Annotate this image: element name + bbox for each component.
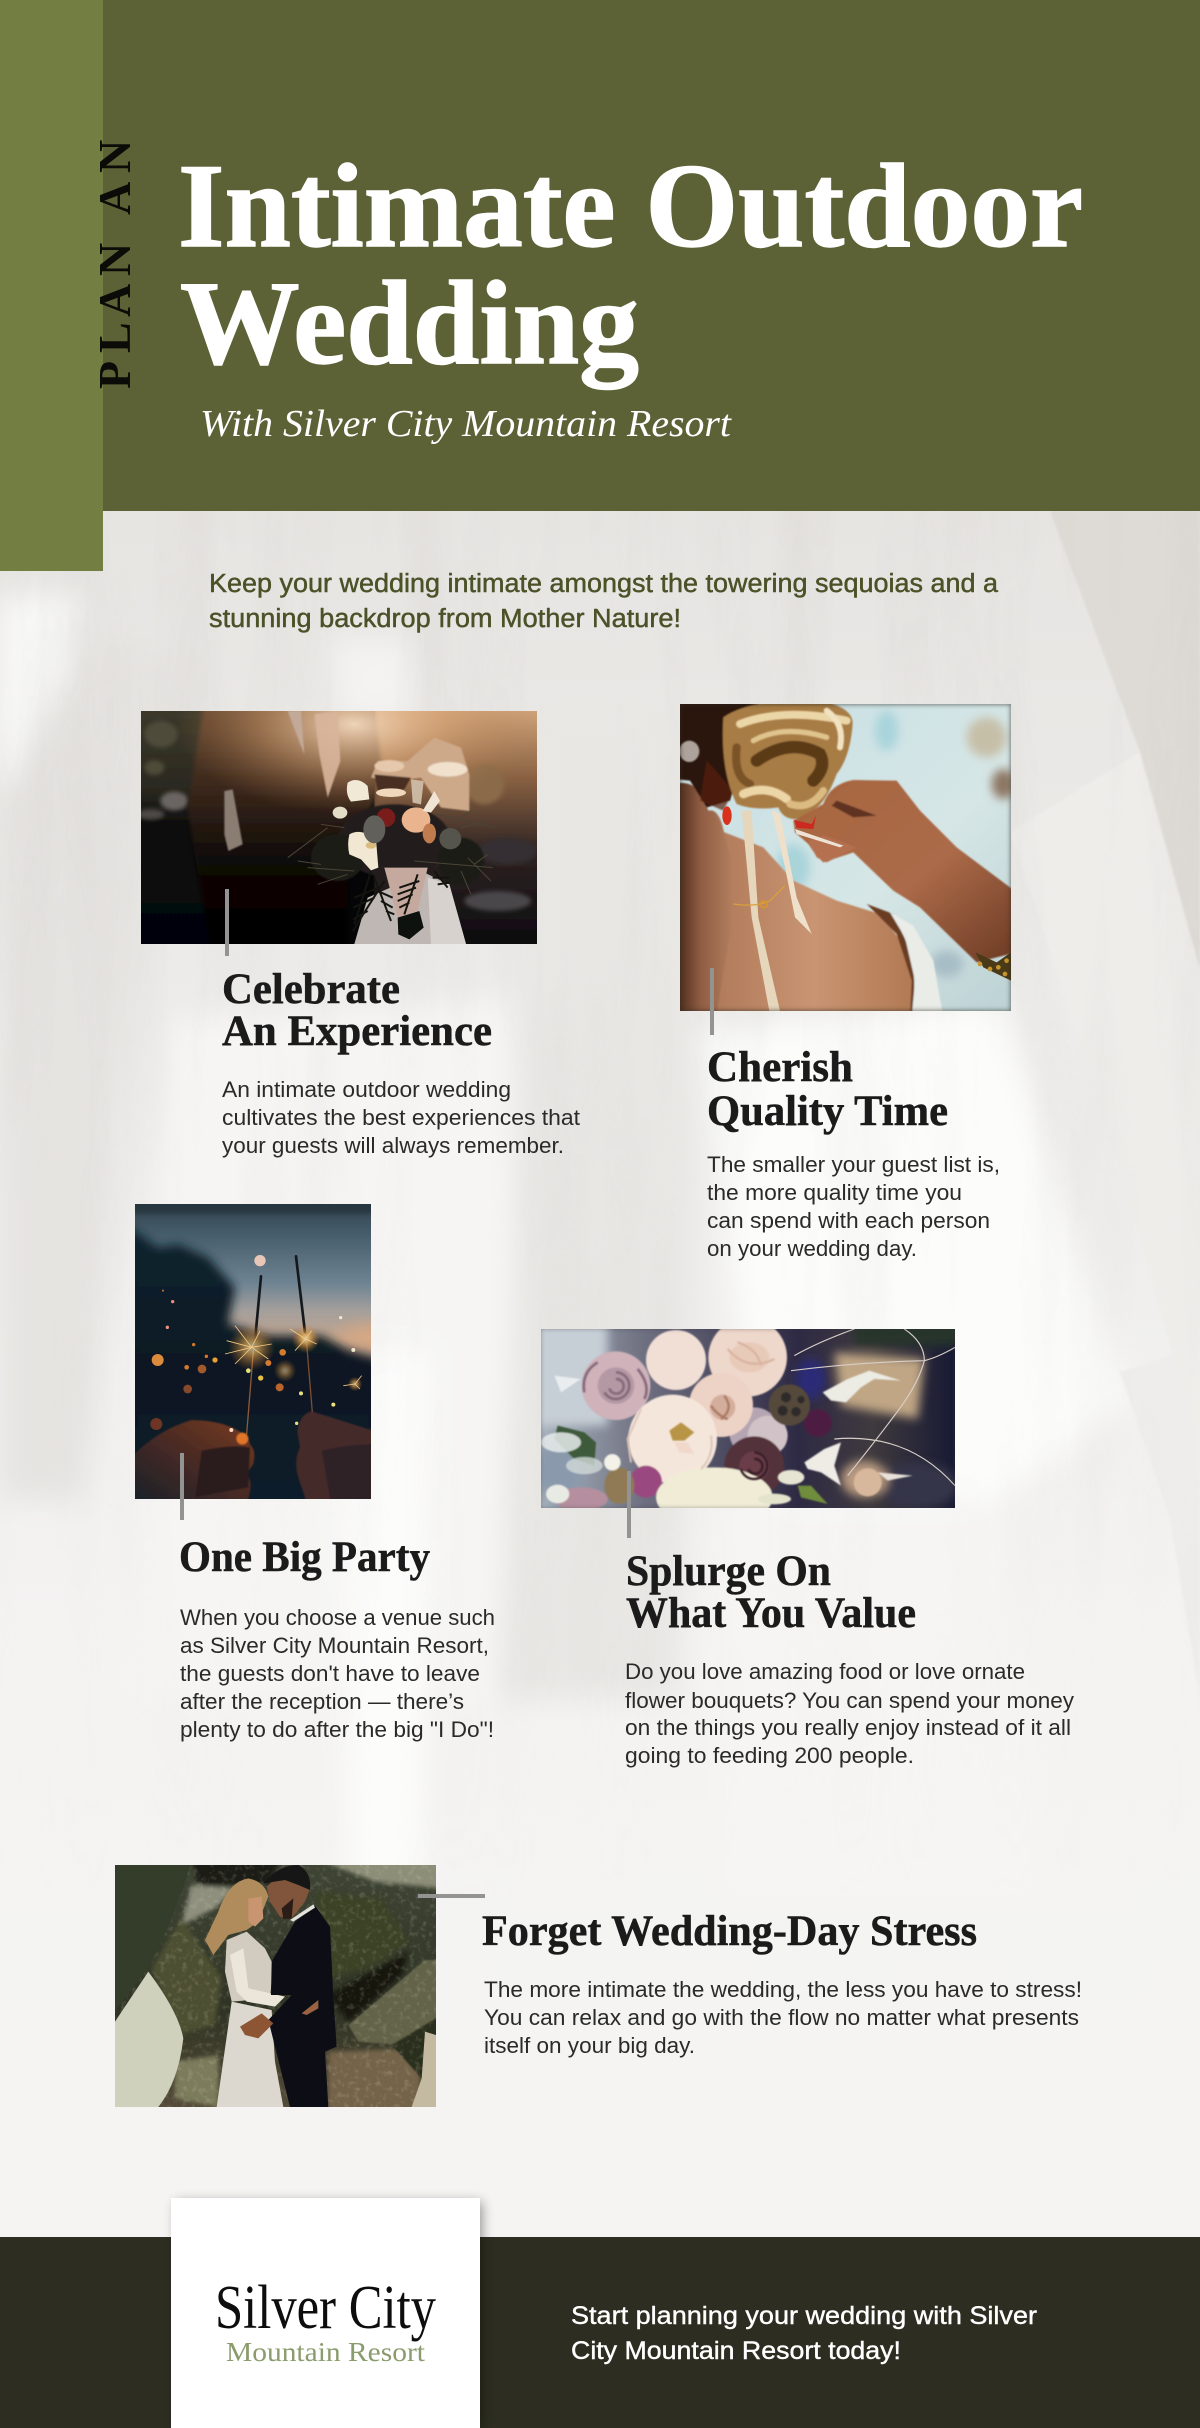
photo: couple among mossy rocks [115, 1865, 436, 2107]
section: cherish quality time: the more quality time you [707, 1180, 962, 1205]
lace bodice and sleeve [225, 1932, 273, 2002]
necklace [733, 886, 785, 905]
logo card [171, 2198, 480, 2428]
rose details [584, 1342, 805, 1479]
intro text [209, 570, 999, 633]
section: celebrate an experience: your guests will always remember. [222, 1133, 564, 1158]
logo card shadow [176, 2202, 482, 2428]
section: celebrate an experience: An intimate outdoor wedding [222, 1077, 511, 1102]
greenery and white sprigs [541, 1371, 913, 1504]
ribbons [742, 811, 780, 1011]
supporting hand [673, 783, 733, 1017]
sparkler sticks [247, 1256, 312, 1434]
right pale rock [412, 2032, 436, 2107]
section: one big party: One Big Party [179, 1534, 430, 1581]
call to action: City Mountain Resort today! [571, 2337, 901, 2365]
connector lines [180, 889, 714, 1898]
section: splurge on what you value: What You Value [626, 1590, 916, 1637]
section: forget wedding-day stress [482, 1908, 1082, 2058]
section: one big party: the guests don't have to leave [180, 1661, 480, 1686]
hands [240, 2013, 273, 2038]
section: celebrate an experience [222, 966, 581, 1158]
dress strap [890, 912, 943, 1017]
intro text: Keep your wedding intimate amongst the towering sequoias and a [209, 570, 999, 598]
call to action: Start planning your wedding with Silver [571, 2302, 1037, 2330]
title: Wedding [180, 256, 639, 390]
section: celebrate an experience: An Experience [222, 1008, 492, 1055]
section: splurge on what you value: Do you love amazing food or love ornate [625, 1659, 1025, 1684]
section: celebrate an experience: Celebrate [222, 966, 400, 1013]
subtitle: With Silver City Mountain Resort [200, 403, 733, 445]
groom shirt [290, 1904, 315, 1922]
photo: two sparklers at dusk [135, 1204, 371, 1499]
section: cherish quality time: Cherish [707, 1044, 853, 1091]
groom suit [268, 1906, 337, 2107]
footer band [0, 2237, 1200, 2428]
section: one big party: plenty to do after the big "I Do"! [180, 1717, 494, 1742]
section: forget wedding-day stress: itself on your big day. [484, 2033, 695, 2058]
photo: bride with hair ribbon [680, 704, 1011, 1011]
back and shoulder [713, 831, 913, 1017]
vignette [677, 701, 1014, 1014]
section: cherish quality time: can spend with each person [707, 1208, 990, 1233]
section: one big party: When you choose a venue such [180, 1605, 495, 1630]
intro text: stunning backdrop from Mother Nature! [209, 605, 681, 633]
bracelet [975, 952, 1011, 981]
red nails [722, 806, 732, 825]
vertical label: PLAN AN: PLAN AN [89, 140, 140, 389]
section: forget wedding-day stress: Forget Wedding-Day Stress [482, 1908, 977, 1955]
section: splurge on what you value: going to feeding 200 people. [625, 1743, 914, 1768]
bokeh lights [150, 1290, 355, 1430]
section: splurge on what you value: flower bouquets? You can spend your money [625, 1688, 1075, 1713]
logo card: Mountain Resort [226, 2337, 426, 2367]
raised arm and hand [793, 780, 1017, 962]
header band [0, 0, 1200, 511]
section: splurge on what you value: Splurge On [626, 1548, 831, 1595]
section: cherish quality time: on your wedding day. [707, 1236, 917, 1261]
sunlit boulder [115, 1972, 183, 2107]
section: cherish quality time: The smaller your guest list is, [707, 1152, 1000, 1177]
mossy tree trunk [112, 1862, 192, 2015]
lace sleeve [371, 738, 469, 811]
call to action [571, 2302, 1037, 2365]
flowers [333, 779, 461, 870]
section: one big party: after the reception — there’s [180, 1689, 464, 1714]
sparks [228, 1324, 275, 1371]
roses [554, 1318, 832, 1527]
fern fronds [353, 871, 449, 931]
section: cherish quality time [707, 1044, 1000, 1261]
bride dress [217, 2002, 283, 2107]
section: cherish quality time: Quality Time [707, 1088, 948, 1135]
dress skirt [354, 868, 466, 944]
groom head [267, 1870, 310, 1918]
logo card: Silver City [215, 2274, 436, 2342]
title: Intimate Outdoor [178, 139, 1083, 272]
hands [128, 1411, 378, 1507]
section: forget wedding-day stress: The more intimate the wedding, the less you have to stress! [484, 1977, 1082, 2002]
green side tab [0, 0, 103, 571]
background: faded redwood forest [0, 511, 1200, 1865]
photo: rose bouquet [541, 1329, 955, 1508]
section: one big party [179, 1534, 495, 1742]
hair [673, 697, 760, 807]
foliage shadow [338, 804, 451, 878]
title [178, 139, 1083, 390]
section: splurge on what you value: on the things you really enjoy instead of it all [625, 1715, 1071, 1740]
photo: bride and groom bouquet [141, 711, 537, 944]
section: forget wedding-day stress: You can relax and go with the flow no matter what presents [484, 2005, 1079, 2030]
section: celebrate an experience: cultivates the best experiences that [222, 1105, 581, 1130]
bride hair [205, 1878, 268, 1955]
section: splurge on what you value [625, 1548, 1075, 1768]
section: one big party: as Silver City Mountain Resort, [180, 1633, 489, 1658]
